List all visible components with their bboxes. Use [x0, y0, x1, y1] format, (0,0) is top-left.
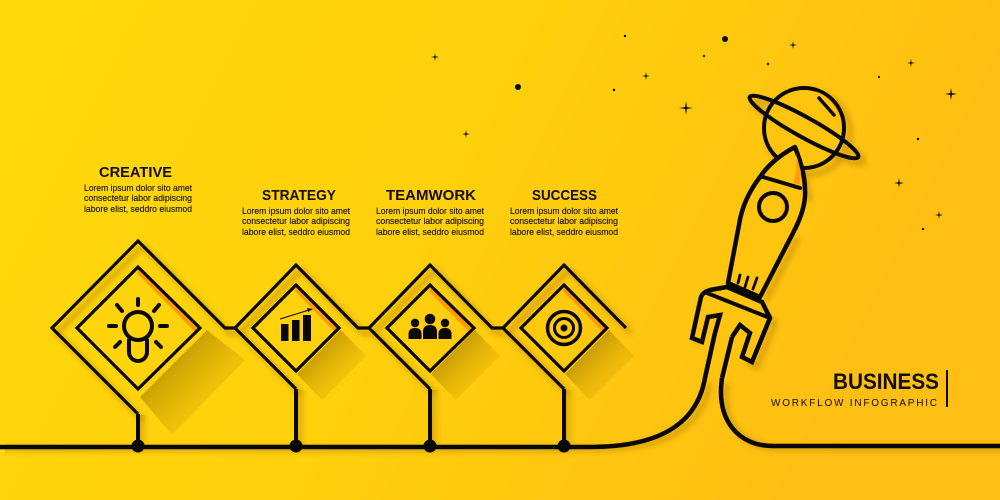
step 4: success [503, 187, 626, 452]
text: strategy description [242, 206, 350, 237]
soft line shadows [0, 92, 1000, 449]
connector to timeline [294, 389, 298, 447]
inner diamond 4 [521, 285, 607, 371]
step 3: teamwork [369, 187, 503, 452]
step 2: strategy [235, 187, 369, 452]
marker dot 3 [424, 440, 436, 452]
text: creative description: labore elist, seddro eiusmod [84, 204, 192, 214]
text: teamwork description: consectetur labor adipiscing [376, 216, 484, 226]
heading: creative: CREATIVE [99, 164, 172, 181]
text: success description: labore elist, seddro eiusmod [510, 227, 618, 237]
outer diamond 4 [503, 265, 626, 389]
text: creative description: consectetur labor adipiscing [84, 193, 192, 203]
icon: bar chart with arrow [280, 308, 313, 341]
inner diamond 3 [387, 285, 474, 371]
outer diamond 2 [235, 265, 369, 389]
text: success description: Lorem ipsum dolor sito amet [510, 206, 618, 216]
icon: light bulb [109, 299, 167, 361]
text: success description [510, 206, 618, 237]
planet highlight [819, 98, 834, 115]
marker dot 2 [290, 440, 302, 452]
text: creative description [84, 183, 192, 214]
text: strategy description: consectetur labor adipiscing [242, 216, 350, 226]
marker dot 1 [132, 440, 144, 452]
text: strategy description: labore elist, seddro eiusmod [242, 227, 350, 237]
text: success description: consectetur labor adipiscing [510, 216, 618, 226]
text: strategy description: Lorem ipsum dolor sito amet [242, 206, 350, 216]
timeline line [0, 333, 715, 447]
icon: target [548, 312, 580, 344]
outer diamond 3 [369, 265, 503, 389]
rocket nose shading [793, 153, 801, 185]
text: teamwork description: labore elist, seddro eiusmod [376, 227, 484, 237]
nozzle band [707, 293, 770, 318]
step 1: creative [52, 164, 235, 452]
text: creative description: Lorem ipsum dolor sito amet [84, 183, 192, 193]
inner diamond 1 [77, 267, 200, 389]
planet shading [815, 91, 842, 126]
outer diamond 1 [52, 241, 235, 414]
title: business: BUSINESS [833, 369, 939, 394]
rocket body [728, 147, 805, 297]
title divider [946, 370, 948, 407]
rocket [692, 147, 805, 378]
heading: teamwork: TEAMWORK [386, 187, 476, 204]
text: teamwork description: Lorem ipsum dolor sito amet [376, 206, 484, 216]
connector to timeline [136, 414, 140, 447]
planet [745, 88, 863, 168]
connector to timeline [562, 389, 566, 447]
porthole [759, 193, 787, 221]
title block [771, 369, 948, 409]
planet ring [745, 88, 863, 166]
engine vents [738, 275, 757, 289]
heading: strategy: STRATEGY [262, 187, 336, 204]
inner diamond 2 [253, 285, 339, 371]
exhaust ends [705, 333, 732, 378]
heading: success: SUCCESS [532, 187, 597, 204]
text: teamwork description [376, 206, 484, 237]
connector to timeline [428, 389, 432, 447]
stars [431, 35, 957, 230]
marker dot 4 [558, 440, 570, 452]
long shadows of the diamonds [140, 330, 634, 445]
engine nozzle [692, 287, 770, 378]
right exhaust line [721, 337, 1000, 446]
nose separator [763, 177, 800, 188]
subtitle: WORKFLOW INFOGRAPHIC [771, 398, 939, 409]
icon: team of people [408, 314, 452, 339]
